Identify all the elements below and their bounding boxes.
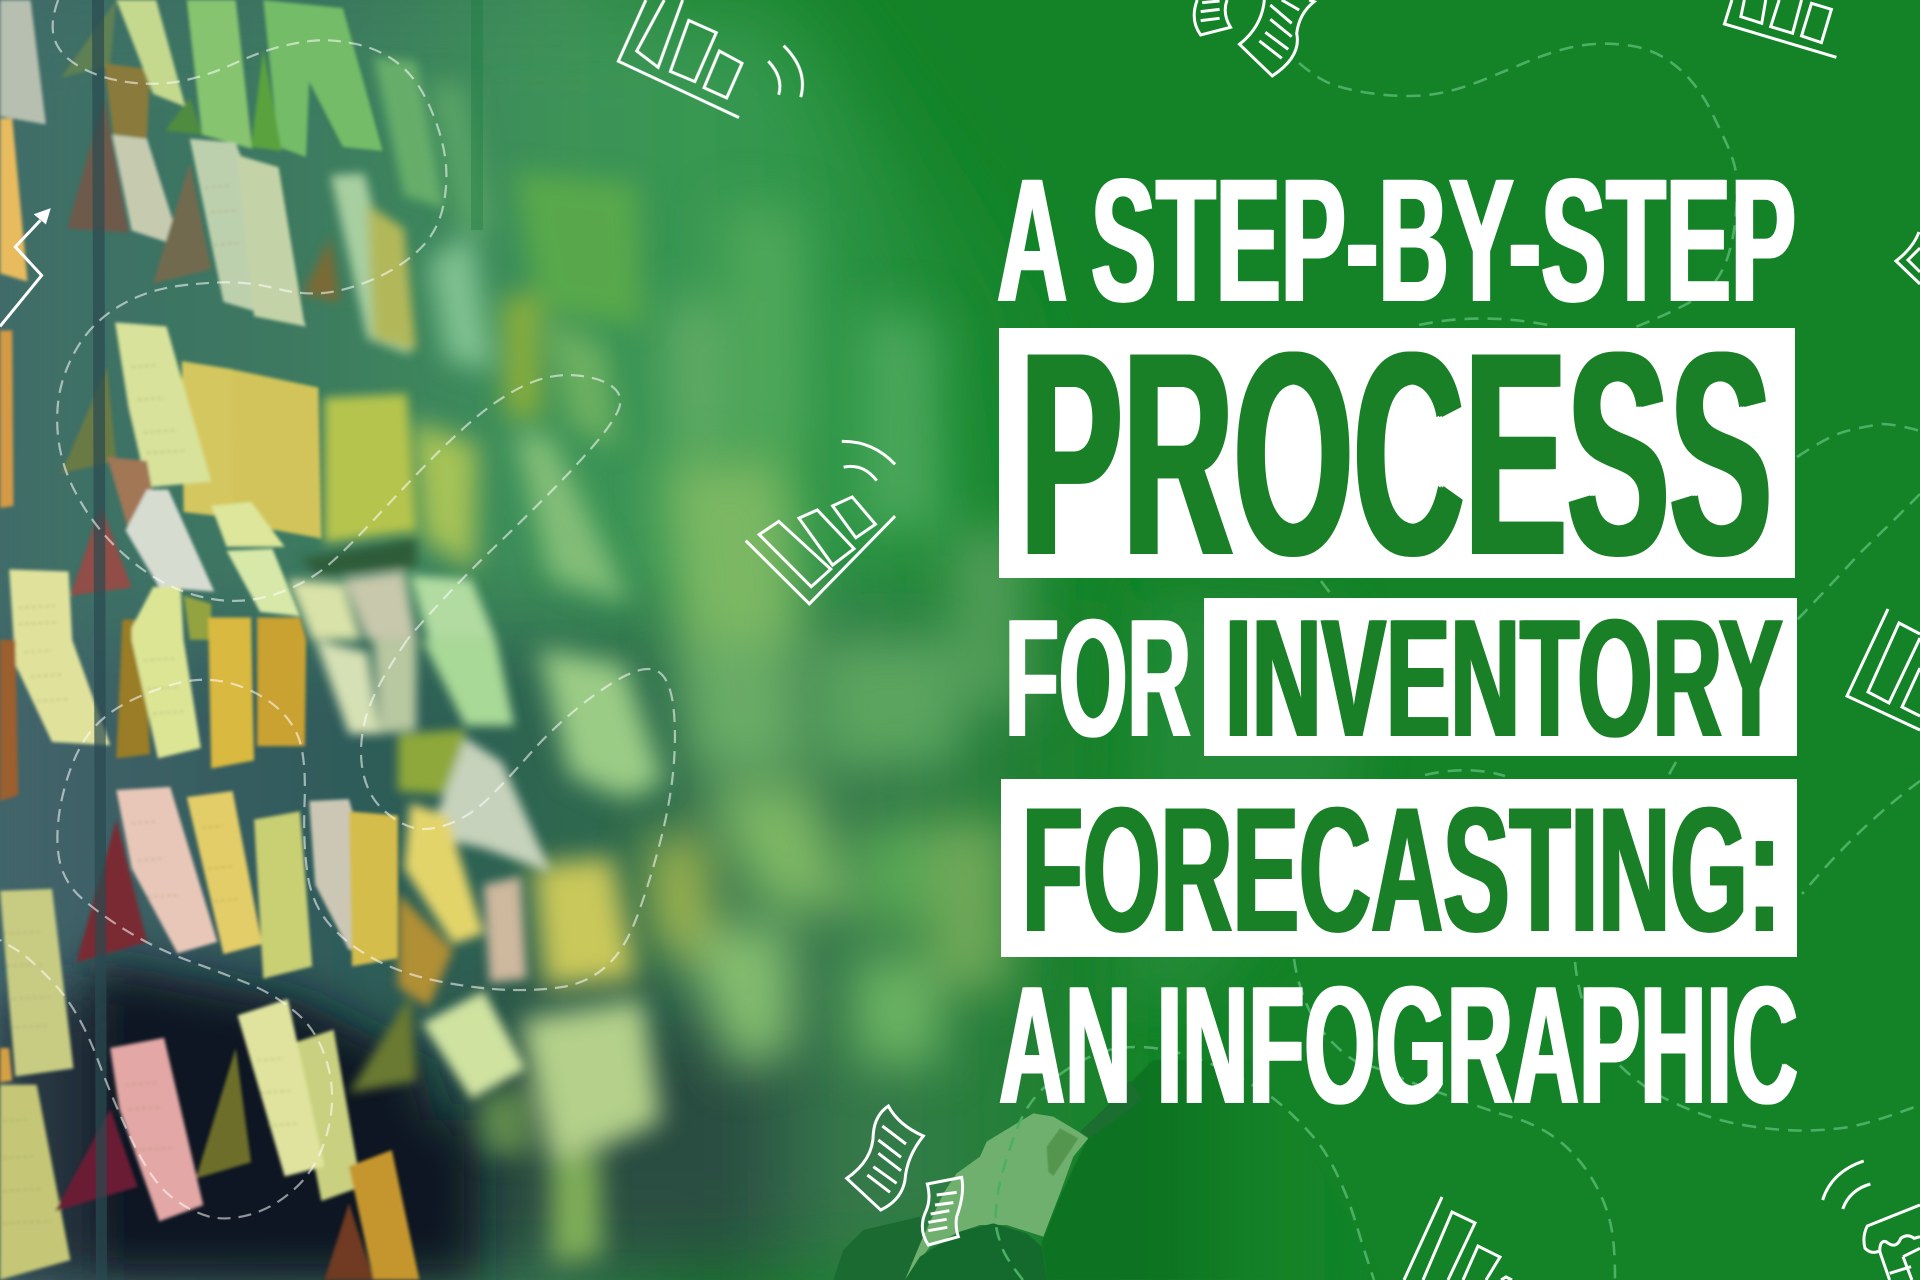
dashed curve: behind heading	[1419, 318, 1548, 325]
dashed curve: right upper	[1797, 424, 1920, 457]
dashed curve: around the hand and bottom centre	[996, 1047, 1374, 1280]
icon: small document, bottom centre	[922, 1177, 963, 1245]
wall underlay	[0, 0, 700, 1280]
dashed curve: bottom right arc	[1575, 962, 1920, 1131]
dashed blob: lower left	[0, 640, 675, 1218]
dashed blob: upper left	[53, 0, 620, 640]
cuff	[905, 1223, 1047, 1280]
dashed curve: right lower	[1802, 781, 1920, 894]
icon: documents, top	[1194, 0, 1314, 76]
far blurred notes	[649, 204, 1360, 1072]
wall tones	[0, 0, 1120, 1280]
coat body	[1042, 1060, 1387, 1280]
dashed curve: mid fragments	[1321, 581, 1676, 778]
dashed curve: right mid	[1797, 494, 1920, 620]
title block	[997, 143, 1798, 1139]
glass partition strips	[92, 0, 483, 1280]
icon: bar chart, middle	[746, 441, 895, 604]
hand	[905, 1113, 1088, 1280]
near notes	[0, 0, 419, 1280]
photo: glass wall with sticky notes	[0, 0, 1387, 1280]
coat lapel	[1080, 1080, 1142, 1138]
handwriting marks	[3, 650, 300, 1223]
icon: partial diamond, right edge	[1896, 232, 1920, 284]
person at lower edge	[833, 1060, 1387, 1280]
dashed curve: top right	[1299, 44, 1737, 328]
icon: bar chart, top centre	[618, 0, 802, 118]
icon: bar chart, right edge	[1847, 609, 1920, 730]
icon: rising arrow, left edge	[0, 208, 51, 326]
sleeve	[833, 1217, 930, 1280]
fist shadow	[1047, 1128, 1078, 1176]
dark lower wall	[0, 960, 480, 1280]
icon: document, bottom centre	[847, 1106, 923, 1210]
dashed curve: bottom middle	[1294, 959, 1615, 1280]
icon: shop with signal, bottom right	[1823, 1161, 1920, 1280]
heading word: FOR: FOR	[1005, 584, 1191, 772]
mid-distance notes	[410, 82, 664, 1264]
icon: bar chart, bottom	[1404, 1197, 1512, 1280]
icon: bar chart, top right	[1724, 0, 1836, 57]
